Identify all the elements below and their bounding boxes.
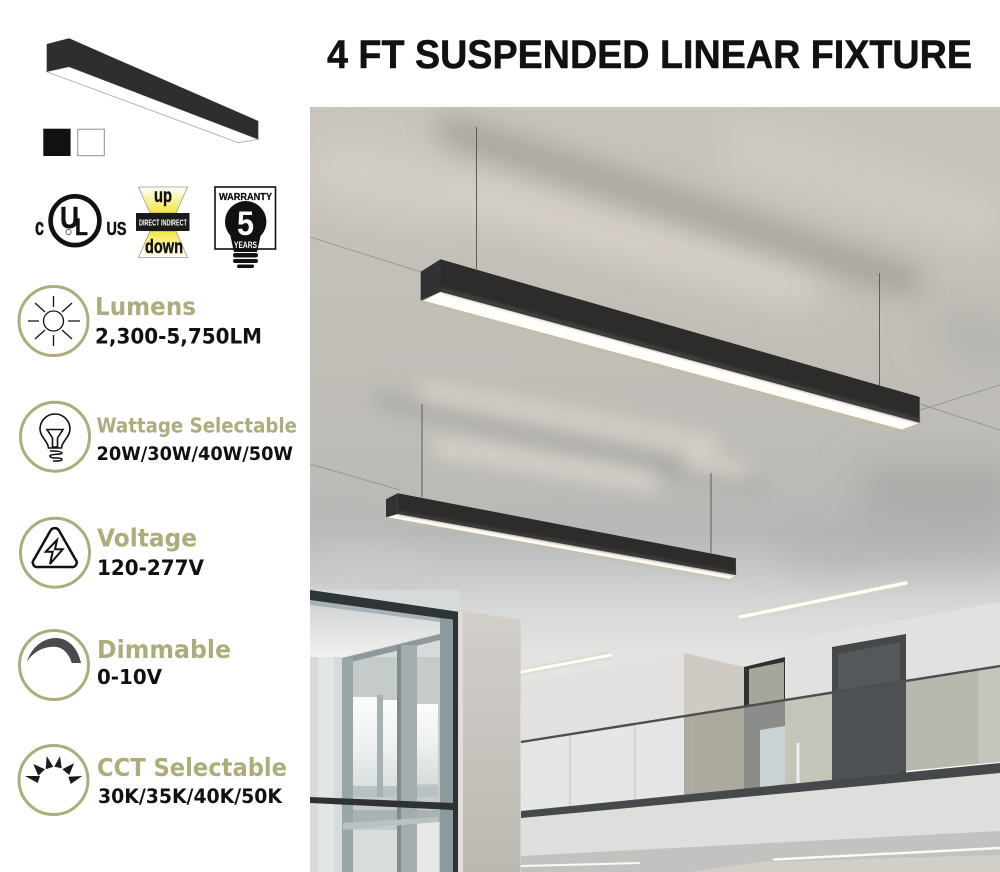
icon: cULus certification bbox=[35, 196, 126, 245]
suspension wires bbox=[422, 127, 880, 553]
icon: voltage triangle bolt bbox=[20, 518, 90, 587]
icon: cULus certification: c bbox=[35, 214, 44, 241]
text: lumens bbox=[95, 292, 262, 350]
pendant fixture: lower bbox=[386, 493, 736, 580]
icon: 5 year warranty bulb: YEARS bbox=[234, 240, 257, 250]
text: CCT selectable: CCT Selectable bbox=[97, 753, 287, 782]
icon: up / down direct indirect badge: DIRECT INDIRECT bbox=[139, 218, 188, 228]
icon: wattage bulb bbox=[20, 402, 90, 471]
product fixture image bbox=[47, 38, 258, 143]
icon: up / down direct indirect badge bbox=[136, 186, 190, 258]
icon: up / down direct indirect badge: up bbox=[154, 186, 172, 207]
title: 4 FT SUSPENDED LINEAR FIXTURE bbox=[327, 33, 972, 77]
icon: 5 year warranty bulb: 5 bbox=[237, 205, 254, 243]
colour swatch: black bbox=[43, 129, 71, 156]
icon: cULus certification: L bbox=[75, 214, 88, 241]
icon: cULus certification: US bbox=[106, 219, 126, 239]
window bbox=[310, 590, 460, 872]
recessed light: left bbox=[521, 655, 611, 672]
pillar bbox=[459, 610, 521, 872]
upper wall left bbox=[521, 707, 684, 741]
text: CCT selectable: 30K/35K/40K/50K bbox=[98, 785, 283, 808]
recessed light: right bbox=[740, 583, 906, 617]
text: dimmable: 0-10V bbox=[97, 665, 163, 689]
colour swatch: white bbox=[78, 129, 104, 156]
text: dimmable bbox=[97, 635, 231, 689]
text: dimmable: Dimmable bbox=[97, 635, 231, 664]
text: wattage selectable: Wattage Selectable bbox=[96, 414, 297, 438]
icon: CCT half sun bbox=[19, 746, 88, 814]
balcony slab bbox=[521, 763, 1000, 860]
icon: up / down direct indirect badge: down bbox=[145, 237, 183, 258]
balcony base band bbox=[521, 763, 1000, 818]
lower lights bbox=[521, 848, 1000, 866]
photo: office interior bbox=[310, 107, 1000, 872]
window frame bbox=[310, 590, 458, 872]
text: CCT selectable bbox=[97, 753, 287, 808]
ceiling bbox=[310, 107, 1000, 707]
pendant fixture: upper bbox=[421, 259, 920, 431]
glass balustrade bbox=[521, 667, 1000, 812]
icon: cULus certification: U bbox=[60, 200, 79, 235]
dark door bbox=[832, 634, 906, 790]
doorway bbox=[744, 657, 785, 706]
wall: beige column bbox=[684, 653, 744, 715]
text: voltage: 120-277V bbox=[97, 556, 204, 581]
text: wattage selectable: 20W/30W/40W/50W bbox=[96, 443, 293, 465]
lower ceiling bbox=[521, 831, 1000, 872]
icon: 5 year warranty bulb: WARRANTY bbox=[219, 192, 272, 203]
ceiling panel joints bbox=[310, 237, 1000, 490]
icon: dimmable arc bbox=[20, 630, 88, 700]
rail bbox=[521, 666, 1000, 742]
text: lumens: Lumens bbox=[95, 292, 196, 321]
text: voltage: Voltage bbox=[97, 524, 197, 553]
icon: lumens sun bbox=[19, 286, 88, 356]
icon: 5 year warranty bulb bbox=[215, 187, 276, 268]
text: wattage selectable bbox=[96, 414, 297, 465]
text: lumens: 2,300-5,750LM bbox=[95, 324, 262, 350]
upper wall right bbox=[910, 602, 1000, 620]
text: voltage bbox=[97, 524, 204, 581]
